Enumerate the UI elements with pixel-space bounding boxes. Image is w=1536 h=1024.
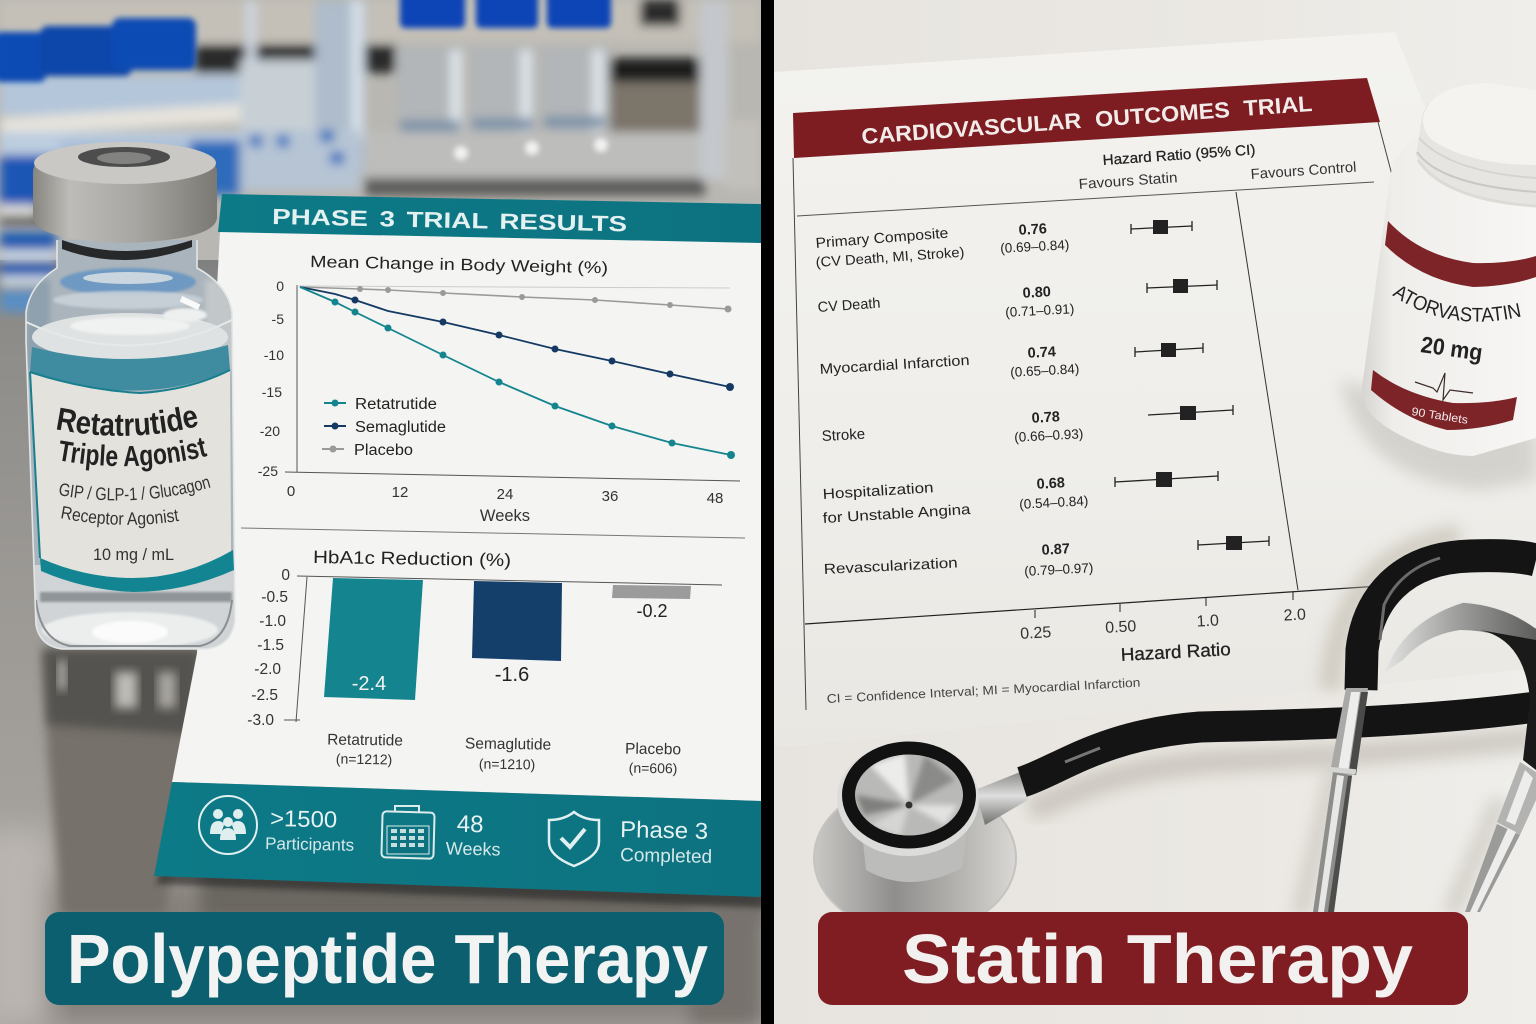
y axis labels: -5 — [272, 311, 284, 327]
column headers: Favours Statin — [1078, 170, 1178, 193]
group labels: Retatrutide — [327, 731, 403, 750]
column headers: Hazard Ratio (95% CI) — [1102, 142, 1256, 169]
row: hospitalization for unstable angina: 0.68 — [1036, 475, 1065, 493]
row: primary composite — [815, 220, 1192, 270]
row: primary composite: (0.69–0.84) — [1000, 237, 1070, 256]
chest piece base — [814, 782, 1016, 934]
vial — [25, 142, 236, 650]
legend: Placebo — [354, 442, 413, 459]
table header: CARDIOVASCULAR OUTCOMES TRIAL — [861, 91, 1313, 149]
chart title: HbA1c Reduction (%) — [313, 547, 511, 570]
row: primary composite: (CV Death, MI, Stroke) — [815, 244, 965, 270]
hazard ratio axis: 2.0 — [1283, 606, 1306, 625]
paper: cardiovascular outcomes trial — [774, 32, 1398, 710]
x axis labels: Weeks — [480, 507, 530, 525]
row: primary composite: Primary Composite — [815, 226, 949, 252]
bar chart: HbA1c reduction — [247, 547, 722, 776]
placebo line — [300, 286, 732, 312]
vial label: Triple Agonist — [60, 438, 208, 472]
legend: Semaglutide — [355, 419, 446, 436]
row: myocardial infarction: 0.74 — [1027, 344, 1056, 362]
bottle label: 90 Tablets — [1411, 406, 1469, 427]
hazard ratio axis: Hazard Ratio — [1120, 639, 1231, 665]
row: stroke: Stroke — [821, 426, 866, 445]
steel surface — [0, 648, 761, 1024]
vial reflection — [42, 648, 205, 915]
icon: shield — [549, 812, 599, 866]
stat: phase 3 completed: Phase 3 — [620, 816, 708, 844]
group labels — [327, 731, 681, 776]
x axis labels: 12 — [392, 484, 408, 501]
stethoscope — [814, 535, 1536, 934]
row: myocardial infarction: (0.65–0.84) — [1010, 361, 1080, 380]
vial cap — [33, 142, 217, 243]
row: myocardial infarction: Myocardial Infarction — [819, 353, 970, 378]
row: revascularization — [823, 536, 1269, 579]
y axis labels: -25 — [258, 463, 278, 479]
row: revascularization: (0.79–0.97) — [1024, 560, 1094, 579]
vial label: Receptor Agonist — [61, 506, 180, 528]
x axis labels: 24 — [497, 486, 513, 503]
line chart: mean change in body weight — [258, 253, 740, 525]
retatrutide line — [300, 287, 735, 459]
y axis labels — [258, 278, 284, 479]
row: stroke: (0.66–0.93) — [1014, 426, 1084, 445]
row: CV death — [817, 279, 1217, 320]
y axis labels: 0 — [281, 567, 290, 584]
vial label: GIP / GLP-1 / Glucagon — [60, 478, 210, 500]
row: CV death: 0.80 — [1022, 284, 1051, 302]
panel: statin therapy — [774, 0, 1536, 1024]
y axis labels: -20 — [260, 423, 280, 439]
y axis labels: -0.5 — [261, 589, 288, 606]
y axis labels: -3.0 — [247, 712, 274, 729]
chest diaphragm — [837, 742, 979, 856]
title pill: statin therapy: Statin Therapy — [902, 920, 1413, 998]
bottle label — [1371, 221, 1536, 430]
stat: participants: Participants — [265, 834, 354, 855]
row: hospitalization for unstable angina: Hospitalization — [822, 480, 934, 503]
y axis labels: -1.5 — [257, 637, 284, 654]
icon: calendar — [381, 806, 435, 859]
semaglutide line — [300, 287, 734, 391]
row: stroke: 0.78 — [1031, 409, 1060, 427]
group labels: (n=606) — [629, 760, 678, 776]
divider — [761, 0, 774, 1024]
hazard ratio axis: 0.25 — [1020, 624, 1052, 643]
row: hospitalization for unstable angina: (0.54–0.84) — [1019, 493, 1089, 512]
stat: participants: >1500 — [270, 805, 337, 832]
row: myocardial infarction — [819, 343, 1203, 380]
legend — [322, 396, 446, 459]
row: hospitalization for unstable angina: for Unstable Angina — [822, 502, 972, 527]
vial label: Retatrutide — [56, 406, 198, 436]
x axis labels: 48 — [707, 490, 723, 507]
outer ear tube arch — [1361, 556, 1536, 690]
bar: placebo: -0.2 — [636, 601, 668, 621]
title pill: polypeptide therapy: Polypeptide Therapy — [67, 920, 708, 998]
stat: phase 3 completed: Completed — [620, 845, 712, 868]
group labels: (n=1210) — [479, 756, 535, 772]
table header — [793, 78, 1380, 158]
y axis labels: -15 — [262, 384, 282, 400]
stat: weeks — [446, 815, 500, 856]
inner ear tube arc — [1360, 602, 1536, 770]
footnote: CI = Confidence Interval; MI = Myocardial Infarction — [826, 676, 1141, 706]
x axis labels: 0 — [287, 483, 295, 500]
bar: retatrutide — [324, 578, 423, 700]
pill bottle — [1339, 92, 1536, 494]
bottle cap — [1416, 83, 1536, 206]
x axis labels — [287, 486, 723, 521]
stats band — [154, 782, 762, 897]
hazard ratio axis: 0.50 — [1105, 618, 1137, 637]
vial label — [29, 345, 234, 592]
stat: weeks: 48 — [457, 811, 484, 838]
stat: phase 3 completed — [621, 820, 711, 866]
stat: weeks: Weeks — [446, 838, 501, 860]
y axis labels: -2.0 — [254, 661, 281, 678]
lab background — [0, 0, 761, 1024]
paper: phase 3 trial results — [154, 194, 770, 908]
metal ear tube: left — [1313, 688, 1368, 912]
group labels: (n=1212) — [336, 751, 392, 767]
title pill: statin therapy — [818, 912, 1468, 1005]
vial glass — [20, 235, 240, 655]
y axis labels: 0 — [276, 278, 284, 294]
y axis labels: -2.5 — [251, 687, 278, 704]
row: revascularization: 0.87 — [1041, 541, 1070, 559]
row: revascularization: Revascularization — [823, 555, 958, 578]
column headers: Favours Control — [1250, 160, 1357, 183]
icon: heartbeat — [1415, 373, 1473, 400]
chart title: Mean Change in Body Weight (%) — [310, 253, 608, 277]
table surface — [774, 0, 1536, 1024]
tube shadow — [1030, 738, 1536, 810]
bar: semaglutide — [472, 581, 562, 686]
icon: participants — [199, 796, 257, 854]
x axis labels: 36 — [602, 488, 618, 505]
group labels: Semaglutide — [465, 735, 551, 754]
bottle body — [1362, 137, 1536, 456]
panel: polypeptide therapy — [0, 0, 761, 1024]
group labels: Placebo — [625, 741, 681, 758]
y axis labels: -1.0 — [259, 613, 286, 630]
hazard ratio axis — [1020, 592, 1306, 665]
bottle label: 20 mg — [1419, 331, 1484, 366]
header band — [218, 194, 762, 243]
bar: retatrutide: -2.4 — [352, 673, 386, 695]
row: stroke — [821, 405, 1233, 445]
bar: placebo — [612, 585, 691, 617]
column headers — [1080, 144, 1356, 189]
black tubing — [1022, 707, 1536, 782]
legend: Retatrutide — [355, 396, 437, 413]
row: primary composite: 0.76 — [1018, 221, 1047, 239]
connector — [975, 772, 1028, 825]
y axis labels: -10 — [264, 347, 284, 363]
bar: semaglutide: -1.6 — [495, 664, 529, 686]
y axis labels — [247, 567, 290, 729]
bottle label: ATORVASTATIN — [1392, 286, 1520, 322]
row: CV death: CV Death — [817, 296, 881, 316]
row: hospitalization for unstable angina — [822, 471, 1218, 527]
stat: participants — [266, 810, 354, 854]
hazard ratio axis: 1.0 — [1196, 612, 1219, 631]
metal ear tube: right — [1465, 762, 1536, 912]
header band: PHASE 3 TRIAL RESULTS — [272, 204, 627, 236]
row: CV death: (0.71–0.91) — [1005, 301, 1075, 320]
vial label: 10 mg / mL — [93, 545, 174, 564]
